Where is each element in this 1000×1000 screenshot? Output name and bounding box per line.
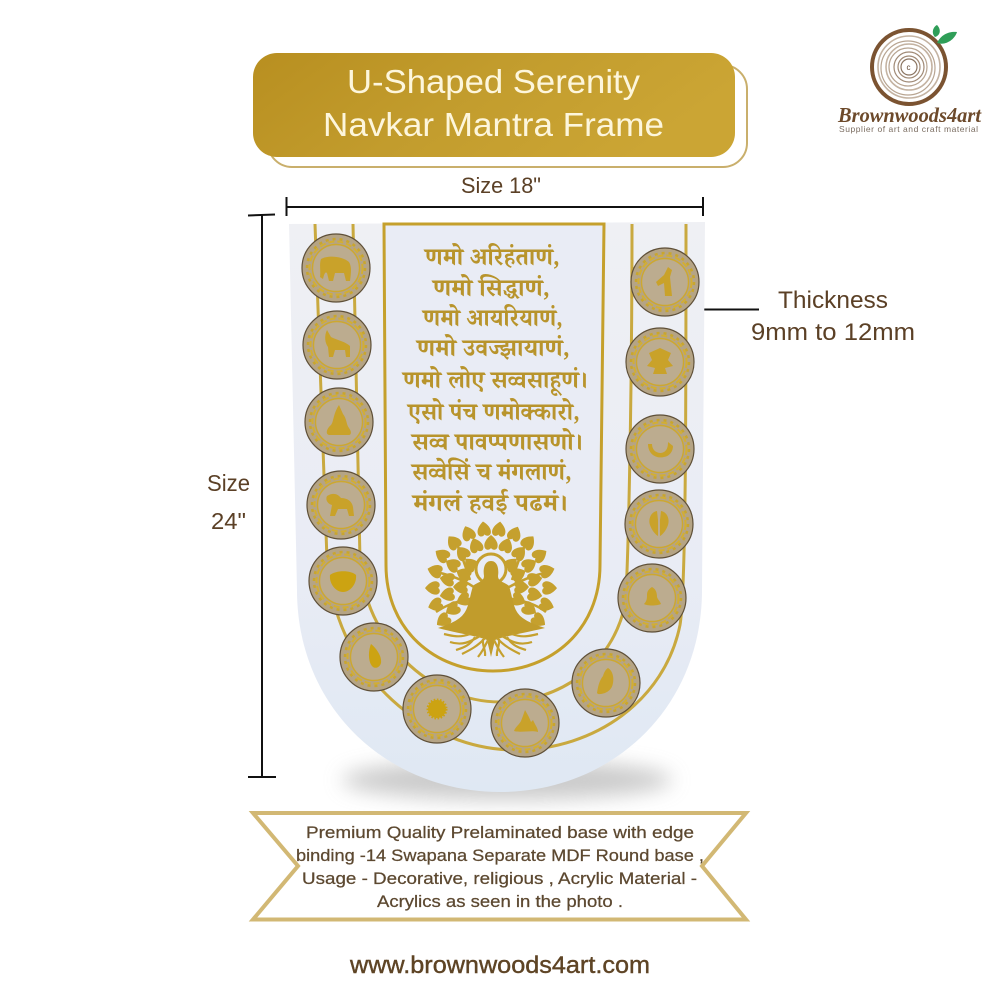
outer gold rail xyxy=(315,224,686,750)
tree branches xyxy=(436,540,548,612)
seated figure xyxy=(438,561,545,657)
board shadow xyxy=(342,760,672,800)
thickness label: 9mm to 12mm xyxy=(751,319,915,346)
height label xyxy=(207,470,250,534)
inner gold rail xyxy=(353,224,632,702)
board base xyxy=(289,222,705,792)
medallion 5: garland xyxy=(309,547,377,615)
thickness label: Thickness xyxy=(778,287,888,314)
ribbon text: Usage - Decorative, religious , Acrylic Material - xyxy=(302,869,697,888)
ribbon text xyxy=(296,823,704,911)
mantra text: णमो सिद्धाणं, xyxy=(431,273,550,312)
width label: Size 18" xyxy=(461,173,541,198)
title line 2: Navkar Mantra Frame xyxy=(323,106,664,143)
logo wordmark: Brownwoods4art xyxy=(837,103,982,127)
medallion 1: elephant xyxy=(302,234,370,302)
logo leaves xyxy=(933,25,957,44)
mantra text: णमो उवज्झायाणं, xyxy=(415,333,570,372)
title banner gold plate xyxy=(253,53,735,157)
ribbon text: Premium Quality Prelaminated base with edge xyxy=(306,823,694,842)
product: U-shaped board xyxy=(289,222,705,792)
medallion 13: throne xyxy=(626,328,694,396)
medallion 9: gem pile xyxy=(572,649,640,717)
medallion 6: moon xyxy=(340,623,408,691)
medallion 10: bell xyxy=(618,564,686,632)
medallion 8: flame xyxy=(491,689,559,757)
roots xyxy=(444,634,538,657)
mantra text: एसो पंच णमोक्कारो, xyxy=(406,397,580,436)
medallion 4: lion walking xyxy=(307,471,375,539)
description ribbon xyxy=(253,813,746,920)
title banner xyxy=(253,53,747,167)
mantra text: णमो अरिहंताणं, xyxy=(423,242,560,281)
medallion 2: bull xyxy=(303,311,371,379)
website url: www.brownwoods4art.com xyxy=(349,952,650,979)
height label: Size xyxy=(207,470,250,496)
title line 1: U-Shaped Serenity xyxy=(347,63,641,100)
height label: 24" xyxy=(211,508,246,534)
height dimension arrow xyxy=(248,214,276,777)
thickness leader line xyxy=(703,308,759,310)
title banner offset outline xyxy=(268,65,747,167)
mantra text: सव्वेसिं च मंगलाणं, xyxy=(410,456,572,496)
mantra text xyxy=(401,242,588,527)
ribbon text: binding -14 Swapana Separate MDF Round base , xyxy=(296,846,704,865)
logo tagline: Supplier of art and craft material xyxy=(839,124,978,134)
mantra text: णमो लोए सव्वसाहूणं। xyxy=(401,365,588,404)
tree and seated figure emblem xyxy=(425,521,557,657)
medallion 14: standing figure xyxy=(631,248,699,316)
width dimension arrow xyxy=(286,197,703,216)
central U frame xyxy=(384,224,604,671)
medallion 12: conch xyxy=(626,415,694,483)
ribbon outline xyxy=(253,813,746,920)
mantra text: सव्व पावप्पणासणो। xyxy=(410,427,583,466)
tree leaves xyxy=(425,521,557,630)
mantra text: णमो आयरियाणं, xyxy=(421,303,563,342)
ribbon text: Acrylics as seen in the photo . xyxy=(377,892,623,911)
mantra text: मंगलं हवई पढमं। xyxy=(411,488,568,527)
thickness label xyxy=(751,287,915,346)
medallion 3: lion xyxy=(305,388,373,456)
logo wood slice xyxy=(872,30,946,104)
medallion 7: sun xyxy=(403,675,471,743)
brand logo xyxy=(837,25,982,134)
logo center mark: c xyxy=(906,63,910,72)
medallion 11: lotus pair xyxy=(625,490,693,558)
halo xyxy=(476,554,506,584)
